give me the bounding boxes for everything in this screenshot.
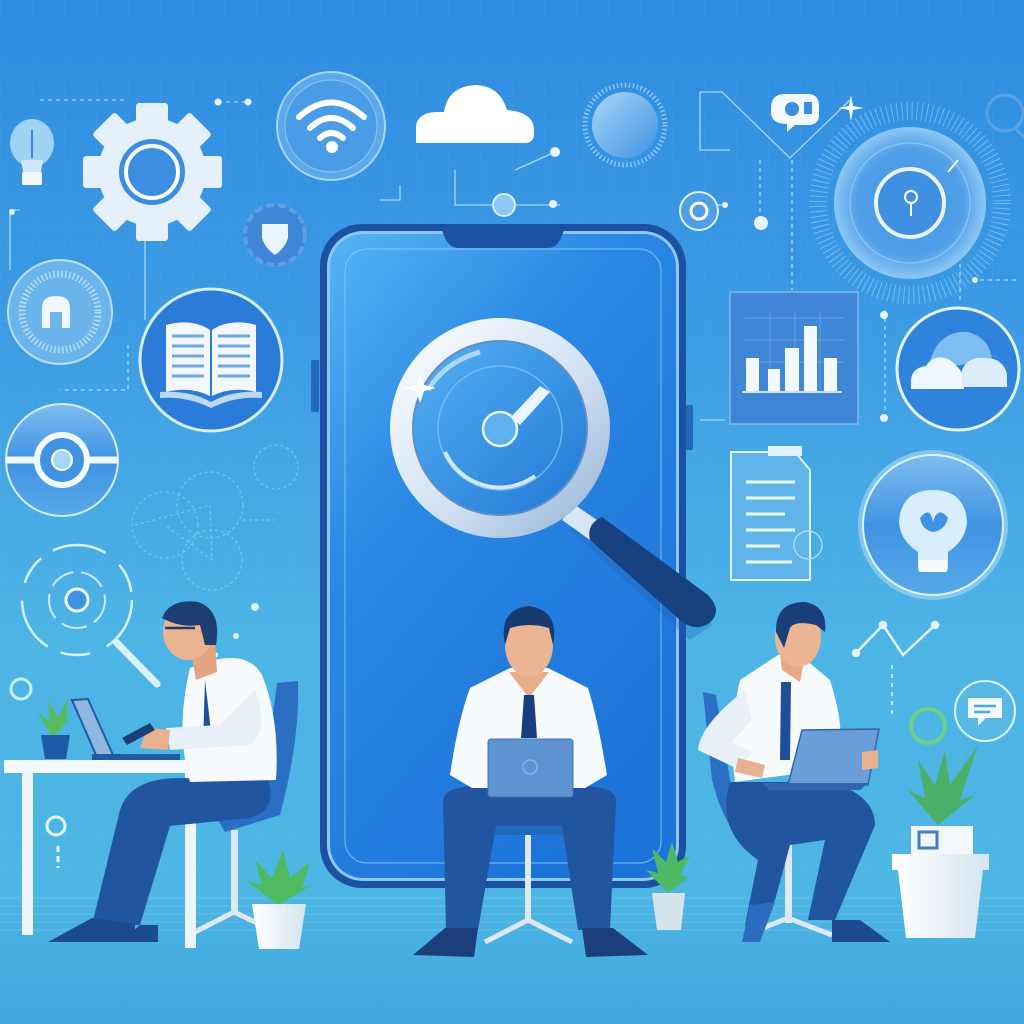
small decorative rings: [11, 679, 65, 868]
icon: gear: [83, 103, 222, 241]
icon: document: [731, 446, 822, 580]
circuit lines: [10, 92, 1020, 420]
icon: chevron with chat: [771, 94, 864, 132]
floor lines: [0, 898, 1024, 930]
icon: target orb with rays: [818, 111, 1002, 295]
icon: wifi badge: [277, 72, 385, 180]
circuit nodes: [9, 98, 978, 658]
icon: small nodes: [493, 192, 718, 230]
person center: [413, 606, 648, 957]
desk: [4, 760, 216, 948]
icon: eye orb: [6, 404, 118, 516]
icon: faint network globe: [132, 445, 298, 590]
chart card: [730, 292, 858, 424]
floor plant center: [646, 842, 690, 930]
floor plant left: [246, 850, 312, 949]
phone: [311, 224, 693, 888]
icon: cloud badge: [897, 308, 1019, 430]
icon: faint search top right: [987, 95, 1024, 137]
person right: [698, 602, 890, 942]
person left: [48, 601, 298, 942]
icon: cloud: [416, 85, 534, 143]
icon: small shield-gear: [245, 205, 305, 265]
magnifying glass: [390, 318, 716, 640]
icon: sphere burst: [585, 85, 665, 165]
line chart right: [853, 622, 938, 715]
icon: tunnel orb: [8, 260, 112, 364]
right plant with frame: [892, 709, 989, 938]
chair: [195, 681, 298, 932]
icon: dashed magnifier: [22, 545, 157, 684]
chair: [483, 825, 573, 942]
chair: [703, 692, 832, 935]
icon: light bulb small: [10, 119, 54, 185]
icon: bulb badge: [858, 450, 1008, 600]
icon: open book badge: [140, 289, 282, 431]
icon: chat bubble: [955, 681, 1015, 741]
desk plant: [37, 698, 74, 759]
laptop on desk: [72, 699, 180, 760]
